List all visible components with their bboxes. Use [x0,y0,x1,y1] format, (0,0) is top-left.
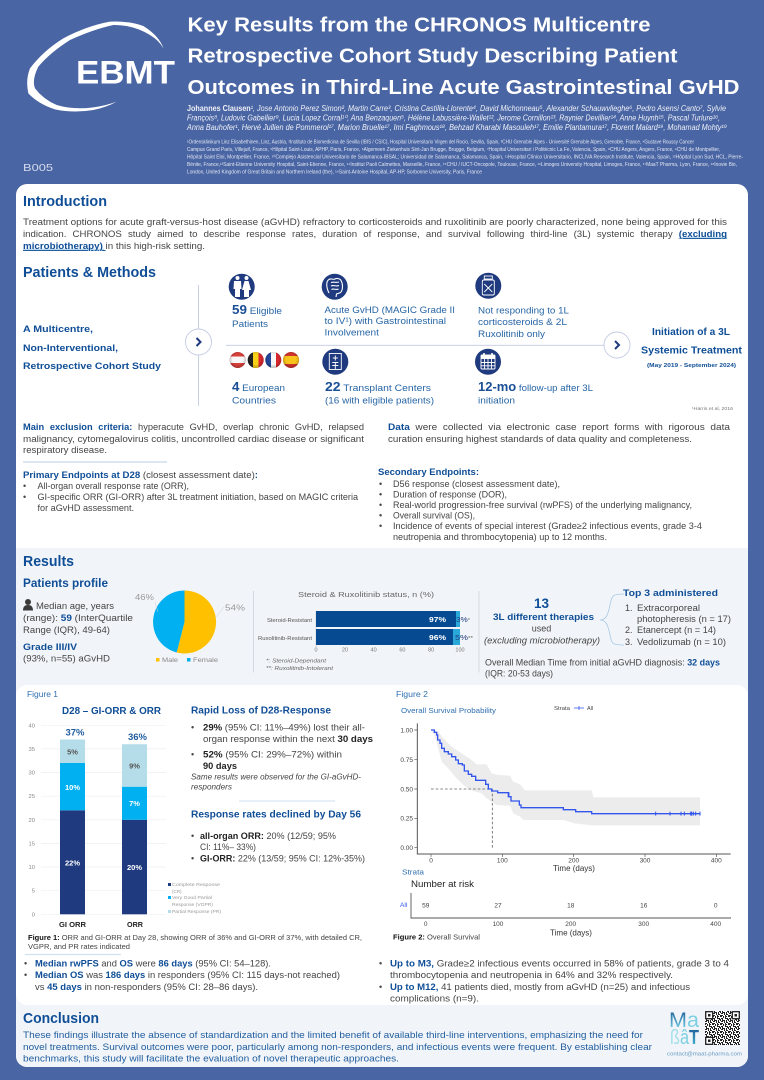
km legend [554,706,593,712]
stacked bar chart: GI-ORR and ORR: 9% [129,761,140,770]
text: rapid loss of response [191,705,373,792]
stacked bar chart: GI-ORR and ORR [29,723,222,929]
text: primary endpoints: GI-specific ORR (GI-ORR) after 3L treatment initiation, based on MAGIC criteria [38,492,358,502]
QR code [705,1011,740,1045]
text: median age: Range (IQR), 49-64) [23,625,110,635]
intro text: indication. CHRONOS study aimed to describe response rates, duration of response, and survival following third-line (3L) systemic therapy (excluding [23,229,727,239]
logo: MaaT: ßâT [670,1027,699,1049]
arrow: left chevron [186,329,212,355]
pie chart: sex [135,590,245,664]
heading: Results: Results [23,553,74,570]
bar chart: steroid and ruxolitinib status: 97% [429,617,447,624]
number at risk table: Time (days) [550,929,592,938]
bar chart: steroid and ruxolitinib status: Steroid-Resistant [267,618,313,624]
chart title: overall survival: Overall Survival Probability [401,706,496,715]
title: Outcomes in Third-Line Acute Gastrointestinal GvHD [188,76,740,99]
text: primary endpoints: • [23,481,26,491]
icon: country flags [230,352,299,368]
stacked bar chart: GI-ORR and ORR: 5% [67,747,78,756]
text: median rwPFS and OS [24,959,340,992]
heading: Patients profile: Patients profile [23,578,108,590]
text: grade [23,642,111,664]
number at risk table: 300 [638,921,650,928]
caption: figure 1: Figure 1: ORR and GI-ORR at Day 28, showing ORR of 36% and GI-ORR of 37%, with detailed CR, [28,933,362,942]
stacked bar chart: GI-ORR and ORR: 10 [29,865,35,871]
chart legend [168,882,222,914]
list: top 3 administered: 2. [625,625,633,635]
text: 59 eligible patients: Patients [232,319,268,329]
number at risk table: 59 [422,902,430,910]
text: grade: (93%, n=55) aGvHD [23,654,111,664]
text: primary endpoints: for aGvHD assessment. [38,503,134,513]
text: rapid loss of response: Same results were observed for the GI-aGvHD- [191,772,361,782]
stacked bar chart: GI-ORR and ORR: 22% [65,859,80,868]
arrow: right chevron [604,332,630,358]
text: secondary endpoints: Duration of response (DOR), [393,490,507,500]
text: initiation of 3L: Initiation of a 3L [652,327,730,338]
km survival chart: 100 [497,858,508,865]
authors: Anna Bauhofer¹, Hervé Jullien de Pommerol¹⁷, Marion Bruelle¹⁷, Imi Faghmous¹⁸, Behzad Kharabi Masouleh¹⁷, Emilie Plantamura¹⁷, Florent Malard¹⁹, Mohamad Mohty¹⁹ [186,123,727,132]
study type: A Multicentre, [23,324,93,335]
panel: results background [16,548,748,698]
chart title: D28: D28 – GI-ORR & ORR [62,705,161,717]
text: acute GvHD: to IV¹) with Gastrointestinal [324,316,446,326]
text: response rates declined [191,809,365,864]
bar chart: steroid and ruxolitinib status: 5% ** [455,635,473,642]
affiliations: London, United Kingdom of Great Britain and Northern Ireland (the), ¹⁹Saint-Antoine Hospital, AP-HP, Sorbonne University, Paris, France [187,170,482,176]
text: 13 therapies: 3L different therapies [493,612,594,623]
text: median rwPFS and OS: Median rwPFS and OS were 86 days (95% CI: 54–128). [35,959,271,969]
conclusion text: These findings illustrate the absence of standardization and the limited benefit of available third-line interventions, emphasizing the need for [23,1030,643,1040]
km legend: Strata [554,706,571,712]
text: data: curation ensuring highest standards of data quality and completeness. [388,434,692,444]
number at risk table: 16 [640,902,648,910]
text: secondary endpoints: D56 response (closest assessment date), [393,479,560,489]
text: exclusion criteria: respiratory disease. [23,445,107,455]
text: secondary endpoints: • [379,479,382,489]
number at risk table: 400 [710,921,722,928]
km survival chart: 0 [429,858,433,865]
text: secondary endpoints: Overall survival (OS), [393,511,475,521]
poster number: B005 [23,162,53,174]
stacked bar chart: GI-ORR and ORR: 30 [29,770,35,776]
affiliations [187,140,743,176]
stacked bar chart: GI-ORR and ORR: 10% [65,783,80,792]
icon: medicine bottle [475,273,501,299]
text: initiation of 3L: Systemic Treatment [641,346,743,357]
chart legend: (CR) [172,889,182,894]
bar chart: steroid and ruxolitinib status: 80 [428,648,434,654]
panel: patients profile [23,578,133,664]
pie chart: sex: 54% [225,604,245,613]
number at risk table: Strata [402,868,425,876]
brace [600,594,624,645]
text: median time: (IQR: 20-53 days) [485,669,553,679]
text: rapid loss of response: 90 days [203,761,237,771]
number at risk table: 200 [565,921,577,928]
bar chart: steroid and ruxolitinib status: 0 [314,648,318,654]
bar chart: steroid and ruxolitinib status: 96% [429,635,447,642]
text: median time [485,658,720,679]
text: median age: Median age, years [36,601,115,611]
text: safety events: complications (n=9). [390,994,479,1004]
stacked bar chart: GI-ORR and ORR: 25 [29,794,35,800]
text: acute GvHD: Acute GvHD (MAGIC Grade II [324,305,455,315]
text: 4 european countries [232,380,285,406]
stacked bar chart: GI-ORR and ORR: 35 [29,747,35,753]
text: not responding: corticosteroids & 2L [478,317,567,327]
text: grade: Grade III/IV [23,642,78,653]
stacked bar chart: GI-ORR and ORR: 20% [127,863,142,872]
authors: François⁸, Ludovic Gabellier⁹, Lucia Lopez Corral¹⁰, Ana Benzaquen⁵, Hélène Labussière-Wallet¹², Jerome Cornillon¹³, Raynier Devillier¹⁴, Anne Huynh¹⁵, Pascal Turlure¹⁶, [187,114,720,122]
text: not responding: Ruxolitinib only [478,329,545,339]
study type [23,324,162,372]
chart legend: Partial Response (PR) [172,909,222,914]
stacked bar chart: GI-ORR and ORR: 20 [29,818,35,824]
stacked bar chart: GI-ORR and ORR: 5 [32,889,35,895]
figure 1 label: Figure 1 [27,690,59,699]
number at risk table: 27 [494,902,502,910]
text: secondary endpoints: Real-world progression-free survival (rwPFS) of the underlying malignancy, [393,500,692,510]
bar chart: steroid and ruxolitinib status: **: Ruxolitinib-Intolerant [266,666,334,672]
intro highlight [23,238,727,250]
text: 12-month follow-up [478,380,593,406]
bar chart: steroid and ruxolitinib status [258,590,473,672]
stacked bar chart: GI-ORR and ORR: ORR [127,922,143,929]
study type: Non-Interventional, [23,343,118,354]
text: response rates declined: CI: 11%– 33%) [200,842,256,852]
authors: Johannes Clausen¹, Jose Antonio Perez Simon², Martin Carre³, Cristina Castilla-Llorente⁴, David Michonneau⁵, Alexander Schauwvlieghe⁶, Pedro Asensi Canto⁷, Sylvie [187,104,727,113]
text: median rwPFS and OS: • [24,970,27,980]
icon: patients [229,274,255,300]
conclusion text [23,1030,652,1064]
section: introduction [23,193,728,251]
affiliations: Campus Grand Paris, Villejuif, France, ⁵Hôpital Saint-Louis, APHP, Paris, France, ⁶Algemeen Ziekenhuis Sint-Jan Brugge, Brugge, Belgium, ⁷Hospital Universitari i Politècnic La Fe, Valencia, Spain, ⁸CHU Angers, Angers, France, ⁹CHU de Montpellier, [187,147,720,153]
text: not responding: Not responding to 1L [478,306,569,316]
text: primary endpoints: • [23,492,26,502]
list: top 3 administered: Extracorporeal [637,603,700,613]
text: secondary endpoints: neutropenia and thrombocytopenia) up to 12 months. [393,532,607,542]
bar chart: steroid and ruxolitinib status: 100 [455,648,465,654]
number at risk table: Number at risk [411,879,475,889]
intro text [23,217,728,251]
title: Retrospective Cohort Study Describing Patient [188,44,678,68]
icon: intestine [322,274,348,300]
stacked bar chart: GI-ORR and ORR: 15 [29,841,35,847]
list: top 3 administered: photopheresis (n = 17) [637,614,731,624]
text: safety events: • [379,959,382,969]
logo: EBMT: EBMT [76,54,175,90]
text: 59 eligible patients: 59 Eligible [232,303,282,317]
logo: MaaT: Ma [669,1009,699,1032]
number at risk table: 0 [424,921,428,928]
number at risk table: 0 [714,902,718,910]
text: rapid loss of response: Rapid Loss of D28-Response [191,705,331,717]
stacked bar chart: GI-ORR and ORR: 40 [29,723,35,729]
logo: EBMT [27,22,175,112]
chart legend: Response (VGPR) [172,902,214,907]
text: median rwPFS and OS: Median OS was 186 days in responders (95% CI: 115 days-not reached) [35,970,340,980]
text: primary endpoints [23,470,358,513]
km survival chart: Time (days) [553,864,595,873]
km survival chart: 0.25 [400,816,413,823]
text: exclusion criteria: Main exclusion criteria: hyperacute GvHD, overlap chronic GvHD, relapsed [23,422,364,432]
heading: Introduction: Introduction [23,193,107,210]
text: 13 therapies: (excluding microbiotherapy) [484,636,600,646]
text: median age [23,601,133,635]
pie chart: sex: 46% [135,593,154,602]
text: rapid loss of response: • [191,722,194,732]
km survival chart: 200 [568,858,580,865]
bar chart: steroid and ruxolitinib status: 60 [399,648,405,654]
stacked bar chart: GI-ORR and ORR: 0 [32,912,35,918]
text: data: Data were collected via electronic case report forms with rigorous data [388,422,730,432]
text: not responding [478,306,569,339]
number at risk table: 18 [567,902,575,910]
caption: figure 1: VGPR, and PR rates indicated [28,942,130,951]
text: response rates declined: • [191,831,194,841]
text: 4 european countries: 4 European [232,380,285,394]
heading: Conclusion: Conclusion [23,1010,99,1027]
number at risk table: All [400,902,408,909]
text: median age: (range): 59 (InterQuartile [23,613,133,623]
text: rapid loss of response: 29% (95% CI: 11%–49%) lost their all- [203,722,365,732]
caption: figure 2: Figure 2: Overall Survival [393,933,480,942]
panel: figures [16,685,748,1005]
reference note: ¹Harris et al, 2016 [692,406,734,411]
text: exclusion criteria: malignancy, cytomegalovirus colitis, uncontrolled cardiac disease or significant [23,434,365,444]
text: primary endpoints: Primary Endpoints at D28 (closest assessment date) : [23,470,258,480]
km survival chart [400,723,731,873]
contact: contact@maat-pharma.com [667,1052,743,1058]
caption: figure 1 [28,933,362,951]
logo: MaaT [669,1009,699,1049]
icon: calendar [475,349,501,375]
stacked bar chart: GI-ORR and ORR: GI ORR [59,922,86,929]
affiliations: Hôpital Saint Eloi, Montpellier, France, ¹⁰Complejo Asistencial Universitario de Salamanca-IBSAL; Universidad de Salamanca, Salamanca, Spain, ¹¹Hospital Clínico Universitario, INCLIVA Research Institute, Valencia, Spain, ¹²Hôpital Lyon Sud, HCL, Pierre- [187,154,743,160]
title: Key Results from the CHRONOS Multicentre [188,14,650,36]
text: initiation of 3L: (May 2019 - September 2024) [647,363,736,369]
list: top 3 administered: Vedolizumab (n = 10) [637,637,726,647]
list: top 3 administered [623,588,731,647]
bar chart: steroid and ruxolitinib status: 20 [342,648,348,654]
stacked bar chart: GI-ORR and ORR: 7% [129,799,140,808]
authors [186,104,727,132]
text: secondary endpoints: • [379,511,382,521]
text: safety events: thrombocytopenia and neutropenia in 64% and 32% respectively. [390,970,673,980]
km survival chart: 0.75 [400,757,413,764]
text: secondary endpoints: • [379,521,382,531]
chart legend: Complete Response [172,882,221,887]
text: response rates declined: all-organ ORR: 20% (12/59; 95% [200,831,336,841]
text: 13 therapies [484,596,600,646]
conclusion text: benchmarks, this study will facilitate the evaluation of novel therapeutic approaches. [23,1054,399,1064]
stacked bar chart: GI-ORR and ORR: 36% [128,732,148,743]
icon: person [23,599,33,610]
list: top 3 administered: 3. [625,637,633,647]
text: exclusion criteria [23,422,365,455]
text: secondary endpoints [378,467,702,542]
text: secondary endpoints: • [379,490,382,500]
text: rapid loss of response: responders [191,782,233,792]
text: rapid loss of response: organ response within the next 30 days [203,734,373,744]
km survival chart: 0.50 [400,786,413,793]
intro text: Treatment options for acute graft-versus-host disease (aGvHD) refractory to corticosteroids and ruxolitinib are poorly characterized, none being approved for this [23,217,728,227]
heading: Patients & Methods: Patients & Methods [23,264,156,281]
text: median rwPFS and OS: vs 45 days in non-responders (95% CI: 28–86 days). [35,982,258,992]
text: median time: Overall Median Time from initial aGvHD diagnosis: 32 days [485,658,720,668]
text: response rates declined: Response rates declined by Day 56 [191,809,361,821]
text: secondary endpoints: Secondary Endpoints: [378,467,479,477]
number at risk table [400,868,731,938]
text: 12-month follow-up: initiation [478,396,515,406]
text: response rates declined: GI-ORR: 22% (13/59; 95% CI: 12%-35%) [200,854,365,864]
text: 13 therapies: used [532,624,551,634]
bar chart: steroid and ruxolitinib status: 40 [371,648,377,654]
stacked bar chart: GI-ORR and ORR: 37% [65,728,85,739]
text: 22 transplant centers [325,380,434,406]
bar chart: steroid and ruxolitinib status: 3% * [456,617,470,624]
list: top 3 administered: 1. [625,603,633,613]
text: 4 european countries: Countries [232,396,276,406]
pie chart: sex: Female [193,657,218,664]
flow connector lines [198,285,604,406]
bar chart: steroid and ruxolitinib status: Steroid & Ruxolitinib status, n (%) [298,590,435,599]
panel: conclusion background [16,990,748,1067]
affiliations: ¹Ordensklinikum Linz Elisabethinen, Linz, Austria, ²Instituto de Biomedicina de Sevilla (IBIS / CSIC), Hospital Universitario Virgen del Rocio, Sevilla, Spain, ³CHU Grenoble Alpes - Université Grenoble Alpes, Grenoble, France, ⁴Gustave Roussy Cancer [187,140,694,146]
chart legend: Very Good Partial [172,895,212,900]
intro text: microbiotherapy) in this high-risk setting. [23,241,205,251]
text: primary endpoints: All-organ overall response rate (ORR), [38,481,189,491]
bar chart: steroid and ruxolitinib status: Ruxolitinib-Resistant [258,636,313,642]
panel: white card [16,184,748,1067]
affiliations: Bénite, France,¹³Saint-Etienne University Hospital, Saint-Etienne, France, ¹⁴Institut Paoli Calmettes, Marseille, France, ¹⁵CHU / IUCT-Oncopole, Toulouse, France, ¹⁶Limoges University Hospital, Limoges, France, ¹⁷MaaT Pharma, Lyon, France, ¹⁸Inovie Bio, [187,162,737,168]
list: top 3 administered: Etanercept (n = 14) [637,625,716,635]
text: data [388,422,730,444]
title [188,14,740,99]
text: safety events: Up to M3, Grade≥2 infectious events occurred in 58% of patients, grade 3 to 4 [390,959,729,969]
list: top 3 administered: Top 3 administered [623,588,718,599]
bar chart: steroid and ruxolitinib status: *: Steroid-Dependant [266,659,327,665]
km legend: All [587,706,593,712]
text: rapid loss of response: • [191,749,194,759]
figure 2 label: Figure 2 [396,690,429,699]
text: median rwPFS and OS: • [24,959,27,969]
text: rapid loss of response: 52% (95% CI: 29%–72%) within [203,749,342,759]
conclusion text: novel treatments. Survival outcomes were poor, particularly among non-responders, and infectious events were frequent. By establishing clear [23,1042,652,1052]
pie chart: sex: Male [162,657,178,664]
text: 22 transplant centers: 22 Transplant Centers [325,380,431,394]
km survival chart: 1.00 [400,728,413,734]
text: secondary endpoints: • [379,500,382,510]
text: safety events [379,959,729,1004]
text: acute GvHD [324,305,455,338]
study type: Retrospective Cohort Study [23,361,162,372]
number at risk table: 100 [493,921,504,928]
text: response rates declined: • [191,854,194,864]
text: initiation of 3L [641,327,743,369]
icon: transplant center [322,349,348,375]
text: 12-month follow-up: 12-mo follow-up after 3L [478,380,593,394]
text: safety events: Up to M12, 41 patients died, mostly from aGvHD (n=25) and infectious [390,982,691,992]
text: 22 transplant centers: (16 with eligible patients) [325,396,434,406]
km survival chart: 300 [640,858,651,865]
text: secondary endpoints: Incidence of events of special interest (Grade≥2 infectious events, grade 3-4 [393,521,702,531]
km survival chart: 0.00 [400,845,413,852]
text: acute GvHD: Involvement [324,328,379,338]
text: safety events: • [379,982,382,992]
km survival chart: 400 [711,858,722,865]
text: 13 therapies: 13 [534,596,549,611]
panel: conclusion [23,1010,652,1064]
text: 59 eligible patients [232,303,282,329]
